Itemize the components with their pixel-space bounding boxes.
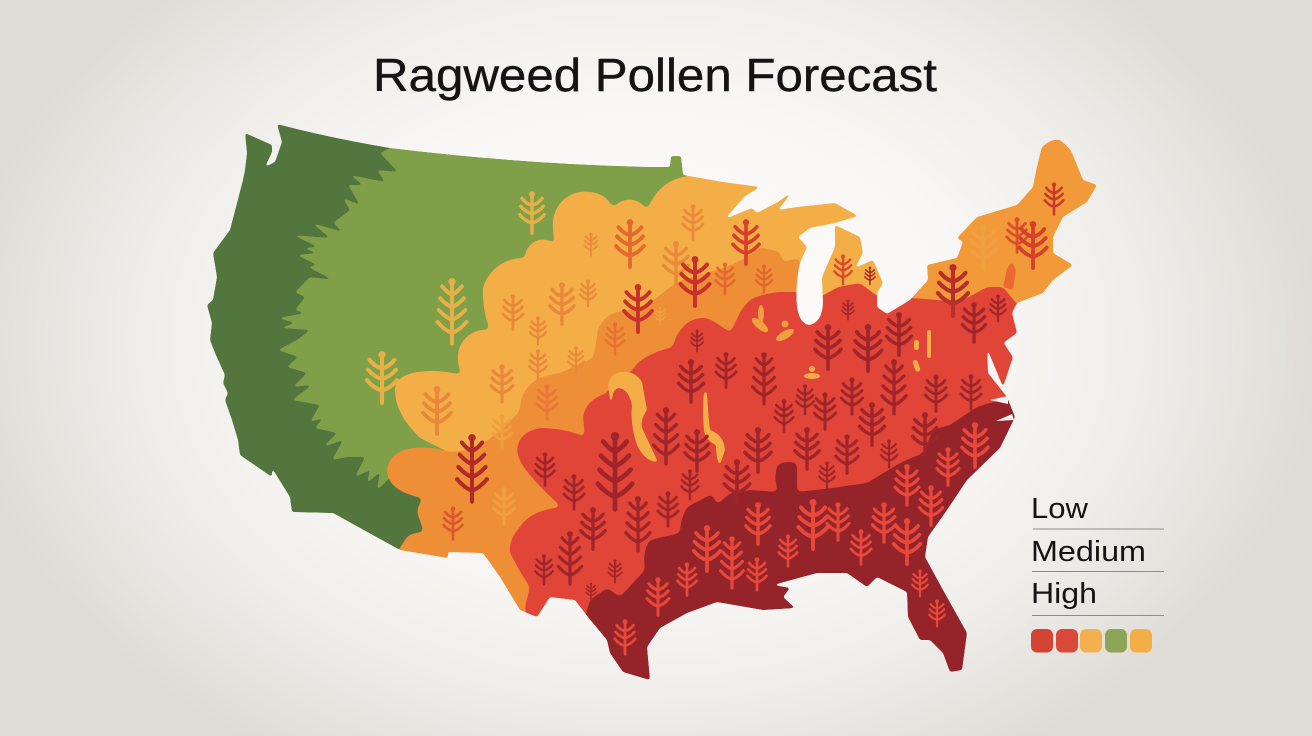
legend label: low: Low [1031, 493, 1089, 525]
legend label: high: High [1031, 578, 1097, 610]
trees on red [535, 296, 1006, 600]
zone: highest pollen, dark red south-east [586, 400, 1014, 680]
zone: moderate pollen, amber [395, 176, 882, 452]
zone: elevated pollen, orange [387, 247, 800, 640]
map of the United States [208, 124, 1096, 680]
title: Ragweed Pollen Forecast [373, 49, 937, 101]
zone: lowest pollen, dark green west coast [208, 124, 422, 550]
trees on green [367, 193, 544, 403]
trees on amber and orange [423, 184, 1063, 539]
small marks on the dark red band [990, 396, 1014, 421]
zone: high pollen, red [510, 284, 1017, 616]
amber tongues inside the red zone [608, 372, 725, 465]
blended orange patch near New England [1004, 264, 1016, 290]
small amber sprigs on red [750, 305, 931, 379]
trees on dark red [615, 424, 988, 654]
legend colour swatches [1031, 629, 1152, 652]
legend label: medium: Medium [1031, 536, 1146, 568]
legend [1031, 493, 1164, 652]
zone: low pollen, green [280, 148, 688, 488]
zone: elevated pollen, north-east [912, 140, 1096, 304]
